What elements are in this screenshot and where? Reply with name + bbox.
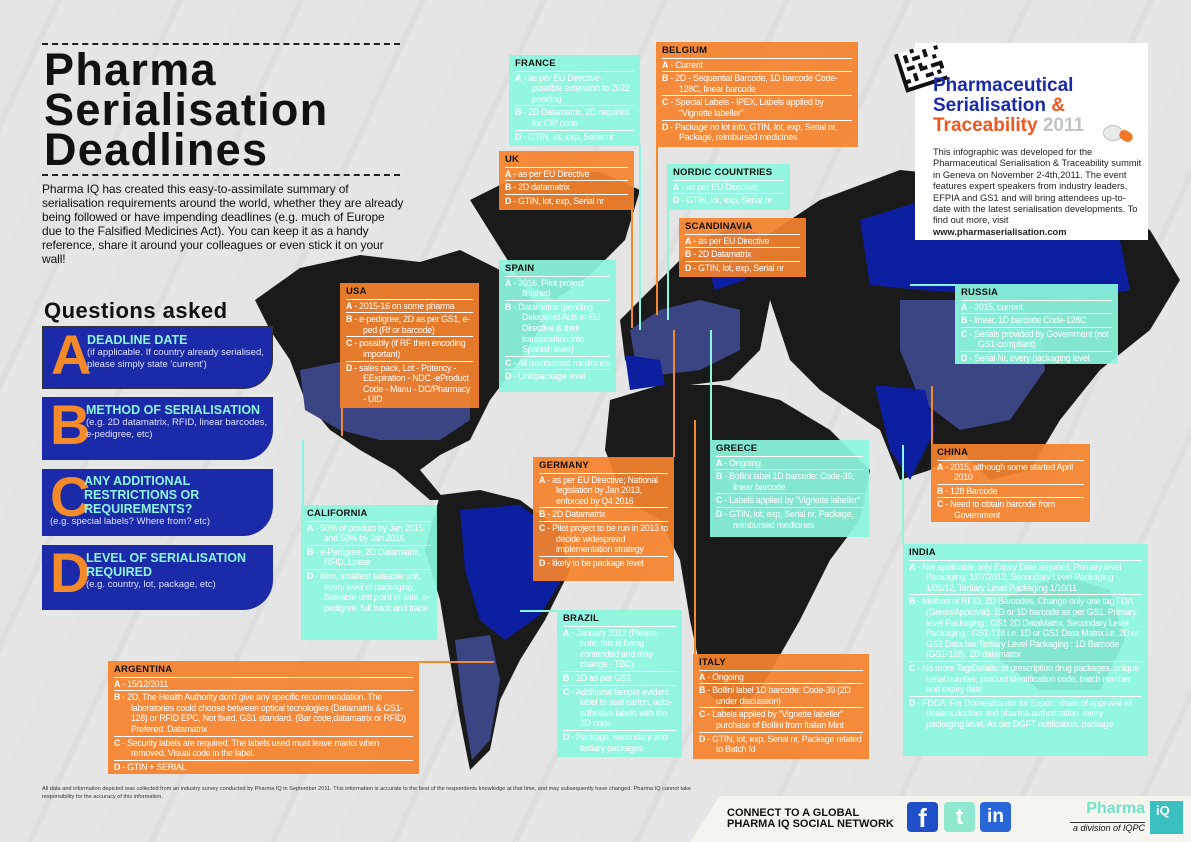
panel: china: B - 128 Barcode [937,486,997,496]
panel: germany: C - Pilot project to be run in 2013 to decide widespread implementation strategy [539,523,668,554]
panel: germany [533,457,674,581]
question B: METHOD OF SERIALISATION [86,403,260,417]
panel: spain: A - 2016, Pilot project finished [505,278,584,298]
panel: italy: A - Ongoing [699,672,744,682]
panel: nordic countries [667,164,790,210]
continent: australia [1000,575,1125,690]
event description: This infographic was developed for the Pharmaceutical Serialisation & Traceability summit in Geneva on November 2-4th,2011. The event features expert speakers from industry leaders, EFPIA and GS1 and will bring attendees up-to-date with the latest serialisation developments. To find out more, visit www.pharmaserialisation.com [933,147,1141,237]
panel: belgium: A - Current [662,60,703,70]
panel: india: D - FDCA: For Domestics not for Export: chain of approval all dealers,doctors and pharma authorization. every packaging level. As per DGFT notification. package [909,698,1132,729]
panel: france: D - GTIN, lot, exp, Serial nr [515,132,614,142]
panel: germany: D - likely to be package level [539,558,643,568]
question A: DEADLINE DATE [87,333,187,347]
panel: uk: B - 2D datamatrix [505,182,570,192]
panel: spain: SPAIN [505,263,534,274]
panel: argentina: B - 2D, The Health Authority don't give any specific recommendation. The laboratories could choose between optical tecnologies (Datamatrix & GS1-128) or RFID EPC, Not fixed. GS1 standard. (Bar code,datamatrix or RFID) Prefered: Datamatrix [114,692,406,734]
panel: france: FRANCE [515,58,556,69]
continent: africa [605,385,870,715]
question D [42,545,273,610]
panel: italy [693,654,869,759]
icon: twitter: t [956,804,963,829]
continent: europe [620,225,780,390]
panel: brazil [557,610,682,757]
question B: B [50,393,90,456]
panel: spain: D - Unit/package level [505,371,586,381]
panel: greece: B - Bollini label 1D barcode: Code-39, linear barcode [716,471,854,492]
panel: usa: C - possibly (if RF then encoding important) [346,338,465,359]
panel: california: B - e-Pedigree, 2D Datamatrix, RFID, Linear [307,547,420,567]
panel: russia: B - linear, 1D barcode Code-128C [961,315,1086,325]
question C: REQUIREMENTS? [84,502,192,516]
panel: spain: B - Datamatrix (pending Delegated Acts in EU Directive & their transposition into Spanish laws) [505,302,600,354]
footer bar: iQ [1156,803,1170,818]
panel: belgium: BELGIUM [662,45,707,56]
logo text: Traceability 2011 [933,115,1084,136]
question B [42,397,273,460]
title [44,44,329,175]
continent: asia [760,170,1180,480]
footnote: All data and information depicted was collected from an industry survey conducted by Pharma IQ in September 2011. This information is accurate to the best of the respondents knowledge at that time, and may subsequently have changed. Pharma IQ cannot take responsibility for the accuracy of this information. [42,786,691,800]
panel: belgium: B - 2D - Sequential Barcode, 1D barcode Code-128C, linear barcode [662,73,838,94]
panel: brazil: D - Package, secondary and tertiary packages [563,732,668,753]
panel: spain: C - All reimbursed medicines [505,358,610,368]
panel: brazil: BRAZIL [563,613,599,624]
panel: italy: C - Labels applied by "Vignette labeller" purchase of Bollini from Italian Mint [699,709,844,730]
continent: greenland [470,172,640,300]
panel: argentina [108,661,419,774]
panel: greece: A - Ongoing [716,458,761,468]
panel: france: B - 2D Datamatrix, 2D required for CIP code [515,107,629,128]
title: Serialisation [44,84,329,135]
intro text: Pharma IQ has created this easy-to-assimilate summary of serialisation requirements around the world, whether they are already being followed or have impending deadlines (e.g. much of Europe due to the Falsified Medicines Act). You can keep it as a handy reference, share it around your colleagues or even stick it on your wall! [42,182,403,266]
panel: usa: D - sales pack, Lot - Potency - EExpiration - NDC -eProduct Code - Manu - DC/Pharmacy - UID [346,363,470,404]
panel: nordic countries: D - GTIN, lot, exp, Serial nr [673,195,772,205]
panel: greece: C - Labels applied by "Vignette labeller" [716,495,860,505]
panel: california: D - item, smallest saleable unit, every level of packaging, Saleable unit point of sale, e-pedigree, full track and trace [307,571,430,613]
panel: india: A - Not applicable,only Expiry Date requried, Primary level Packaging: 1/07/2012, Secondary Level Packaging 1/01/12, Tertiary Level Packaging 1/10/11 [909,562,1121,593]
panel: brazil: B - 2D as per GS1 [563,673,631,683]
panel: russia: C - Serials provided by Government (not GS1-compliant) [961,329,1109,349]
panel: uk: D - GTIN, lot, exp, Serial nr [505,196,604,206]
icon: linkedin [980,802,1011,832]
panel: italy: D - GTIN, lot, exp, Serial nr, Package related to Batch Id [699,734,862,754]
panel: event logo [915,43,1148,240]
question D: (e.g. country, lot, package, etc) [86,579,216,590]
panel: brazil: A - January 2012 (Please note: this is being contended and may change - TBC) [563,628,657,669]
logo: pharma iq: Pharma [1086,800,1145,817]
icon: pills [1103,125,1123,141]
panel: scandinavia: SCANDINAVIA [685,221,752,232]
icon: datamatrix code [894,42,948,93]
panel: belgium: D - Package no lot info, GTIN, lot, exp, Serial nr, Package, reimbursed medicines [662,122,837,142]
panel: russia: D - Serial Nr, every packaging level [961,353,1089,363]
panel: argentina: D - GTIN + SERIAL [114,762,186,772]
panel: greece: D - GTIN, lot, exp, Serial nr, Package, reimbursed medicines [716,509,853,530]
panel: scandinavia: D - GTIN, lot, exp, Serial nr [685,263,784,273]
icon: twitter [944,802,975,832]
question C: (e.g. special labels? Where from? etc) [50,516,210,527]
panel: california [301,505,437,640]
panel: belgium [656,42,858,147]
panel: india: INDIA [909,547,936,558]
panel: italy: B - Bollini label 1D barcode: Code-39 (2D under discussion) [699,685,851,706]
continent: north america [255,250,545,500]
social network text: CONNECT TO A GLOBAL [727,807,859,819]
panel: scandinavia [679,218,806,277]
social network text: PHARMA IQ SOCIAL NETWORK [727,818,894,830]
panel: usa [340,283,479,408]
panel: china: A - 2015, although some started April 2010 [937,462,1073,482]
panel: russia: RUSSIA [961,287,998,298]
panel: scandinavia: B - 2D Datamatrix [685,249,751,259]
icon: linkedin: in [987,806,1004,827]
panel: scandinavia: A - as per EU Directive [685,236,769,246]
heading: questions asked: Questions asked [44,298,228,323]
question C [42,469,273,536]
logo text [933,75,1084,136]
panel: france: A - as per EU Directive - possible extension to 2022 pending [515,73,630,104]
panel: usa: USA [346,286,367,297]
icon: facebook: f [918,803,927,833]
panel: california: A - 50% of product by Jan 2015 and 50% by Jan 2016 [307,523,423,543]
connector lines [639,145,641,330]
question B: (e.g. 2D datamatrix, RFID, linear barcodes, e-pedigree, etc) [86,417,267,440]
panel: germany: GERMANY [539,460,589,471]
question A: (if applicable. If country already serialised, please simply state 'current') [87,347,264,370]
panel: russia [955,284,1118,364]
continent: south america [425,490,570,770]
panel: spain [499,260,616,392]
title: Deadlines [44,124,268,175]
panel: argentina: ARGENTINA [114,664,172,675]
question A [42,326,273,389]
question C: RESTRICTIONS OR [84,488,199,502]
panel: france [509,55,640,146]
question C: ANY ADDITIONAL [84,474,190,488]
panel: uk: UK [505,154,519,165]
panel: belgium: C - Special Labels - IPEX, Labels applied by "Vignette labeller" [662,97,824,118]
panel: china: C - Need to obtain barcode from Government [937,499,1055,520]
panel: china: CHINA [937,447,968,458]
logo text: Serialisation & [933,95,1065,116]
panel: india [903,544,1148,756]
question D: LEVEL OF SERIALISATION [86,551,246,565]
panel: argentina: C - Security labels are required. The labels used must leave marks when removed. Visual code in the label. [114,738,379,758]
question C: C [50,465,90,528]
panel: greece [710,440,869,537]
panel: greece: GREECE [716,443,757,454]
panel: usa: B - e-pedigree, 2D as per GS1, e-ped (Rf or barcode) [346,314,470,335]
footer bar [690,796,1191,842]
panel: usa: A - 2015-16 on some pharma [346,301,454,311]
question A: A [51,323,91,386]
panel: uk [499,151,634,210]
title: Pharma [44,44,217,95]
panel: nordic countries: A - as per EU Directive [673,182,757,192]
panel: india: B - Method of RFID, 2D Barcodes. Change only one tag FDA (Green/Approval). 2D or 1D barcode as per GS1. Primary level Packaging : GS1 2D DataMatrix, Secondary Level Packaging : GS1-128 i.e. 1D or GS1 Data Matrix i.e. 2D or GS1 Data bar,Tertiary Level Packaging : 1D Barcode (GS1-128). 2D datamatrix [909,596,1139,659]
panel: china [931,444,1090,522]
panel: germany: A - as per EU Directive; National legislation by Jan 2013, enforced by Q4 2016 [539,475,658,506]
panel: brazil: C - Additional tamper evident label to seal carton, auto-adhesive labels with the 2D code [563,687,672,728]
question D: REQUIRED [86,565,152,579]
panel: india: C - No more Tag/Details: of prescription drug packages. unique serial number, product identification code, batch number and expiry date [909,663,1139,694]
panel: nordic countries: NORDIC COUNTRIES [673,167,772,178]
panel: germany: B - 2D Datamatrix [539,509,605,519]
footer bar: a division of IQPC [1073,823,1145,833]
panel: argentina: A - 15/12/2011 [114,679,168,689]
panel: russia: A - 2015, current [961,302,1023,312]
panel: uk: A - as per EU Directive [505,169,589,179]
panel: italy: ITALY [699,657,726,668]
question D: D [50,541,90,604]
panel: california: CALIFORNIA [307,508,368,519]
social network text [727,807,894,830]
icon: facebook [907,802,938,832]
logo text: Pharmaceutical [933,75,1073,96]
